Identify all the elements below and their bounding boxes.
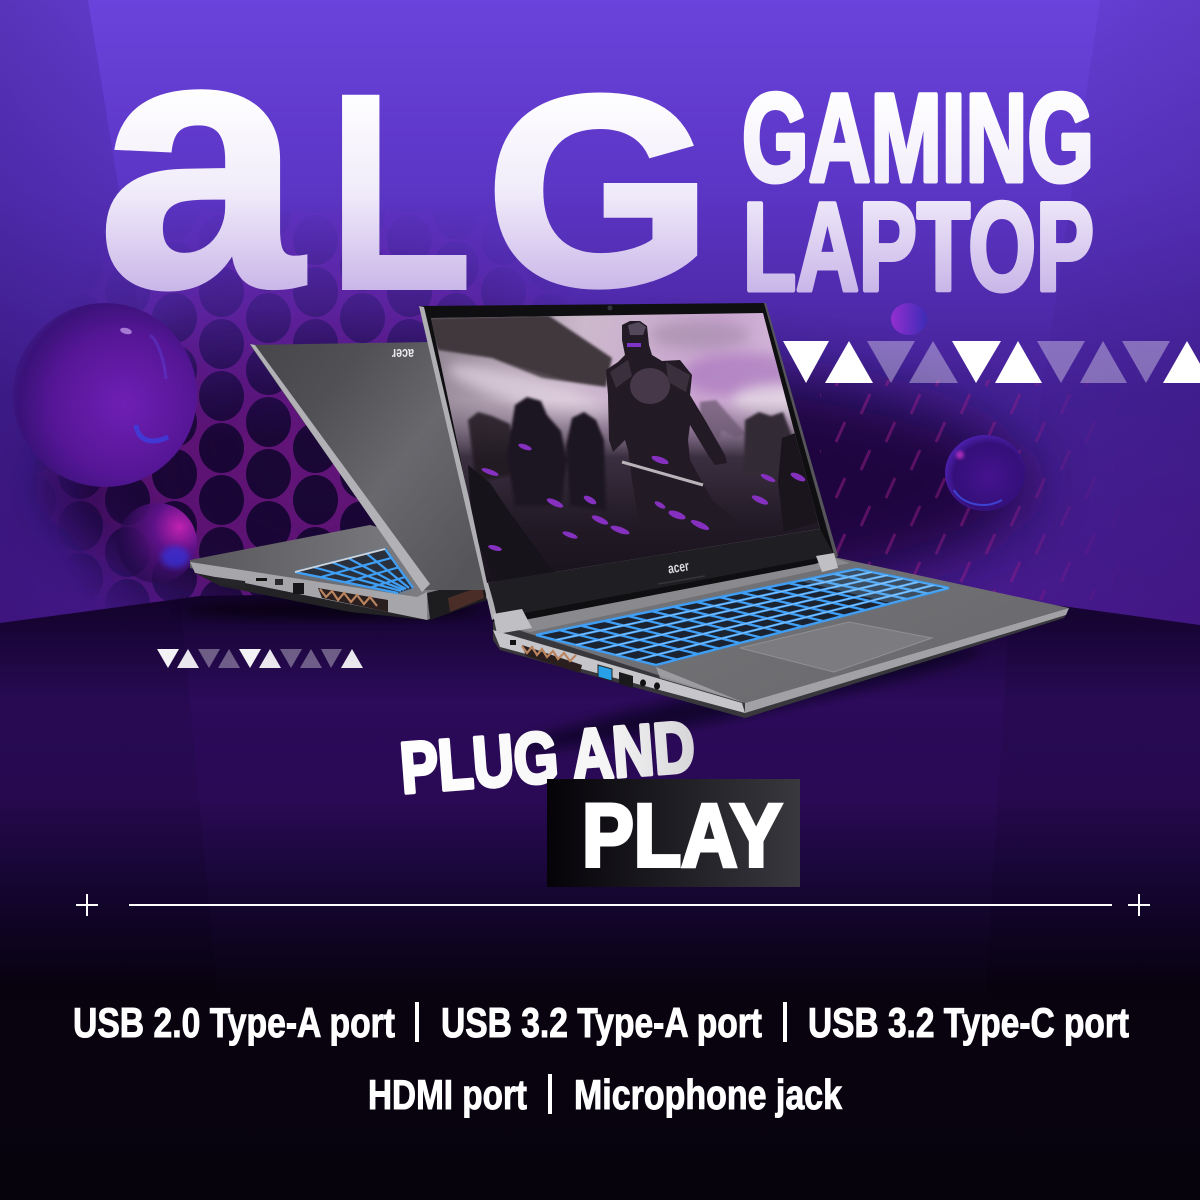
title: ALG logo wordmark xyxy=(97,0,712,363)
laptop: front view xyxy=(419,303,1069,764)
purple haze xyxy=(683,353,807,397)
base deck xyxy=(493,557,1069,703)
rear lid brand: acer xyxy=(392,345,414,362)
triangle strip: left small xyxy=(157,649,363,668)
port list: first line: USB 3.2 Type-A port xyxy=(441,999,762,1046)
front side ports xyxy=(510,640,660,690)
port list: second line: HDMI port xyxy=(368,1071,527,1118)
laptop: rear view xyxy=(180,342,500,620)
army left xyxy=(468,397,746,510)
keyboard xyxy=(536,569,949,665)
heading: plug and: PLUG AND xyxy=(397,707,698,809)
base side edge xyxy=(493,608,1069,718)
title: gaming laptop xyxy=(742,69,1094,317)
ground xyxy=(450,404,820,583)
game artwork on screen xyxy=(425,305,825,590)
port list: first line: USB 3.2 Type-C port xyxy=(808,999,1129,1046)
warrior xyxy=(606,321,727,506)
divider with plus marks xyxy=(76,894,1150,916)
triangle strip: top right xyxy=(783,341,1200,383)
foreground warrior xyxy=(468,465,554,582)
sword xyxy=(622,462,703,485)
title: ALG logo wordmark: G xyxy=(486,41,712,342)
purple petals xyxy=(481,442,807,552)
screen bezel brand: acer xyxy=(667,557,690,576)
port list: second line xyxy=(368,1071,843,1118)
front lid bezel xyxy=(419,303,836,625)
webcam xyxy=(608,306,612,310)
title: ALG logo wordmark: L xyxy=(328,36,472,347)
heading: play badge: PLAY xyxy=(582,785,782,885)
army right xyxy=(743,410,793,464)
rear laptop lid xyxy=(250,342,489,590)
port list: first line: USB 2.0 Type-A port xyxy=(73,999,395,1046)
port list: first line xyxy=(73,999,1129,1046)
rear laptop keyboard xyxy=(295,549,413,593)
touchpad xyxy=(740,622,932,672)
dark mountain xyxy=(425,315,612,387)
rear laptop ports xyxy=(215,577,484,612)
port list: second line: Microphone jack xyxy=(574,1071,843,1118)
decorative spheres xyxy=(13,303,1025,583)
